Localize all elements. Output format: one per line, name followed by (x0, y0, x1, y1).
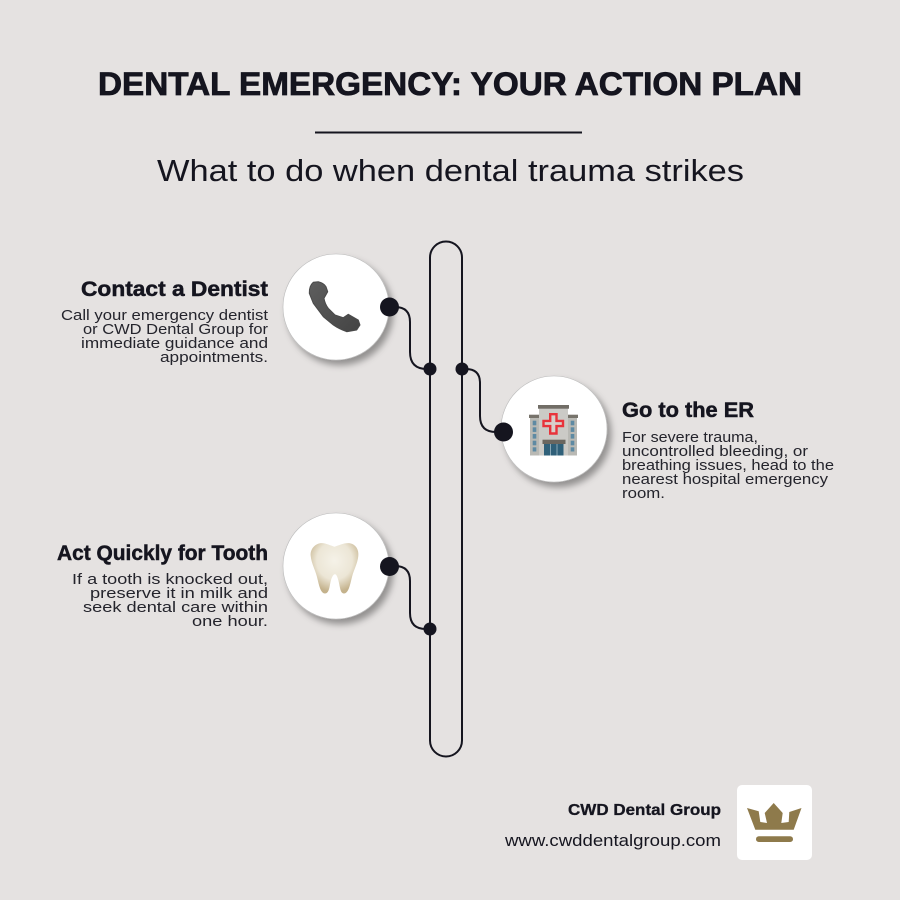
heading: Go to the ER (622, 399, 754, 422)
icon: hospital building (529, 405, 578, 456)
dot large (380, 298, 399, 316)
icon circle: tooth (283, 513, 389, 619)
dot small (456, 362, 468, 376)
icon circle: hospital (501, 376, 607, 482)
connector: line to hospital (462, 369, 504, 432)
description: seek dental care within (83, 600, 268, 616)
panel: act quickly for tooth (57, 513, 436, 636)
connector: tooth to line (389, 566, 430, 629)
icon: tooth (311, 543, 358, 594)
connector: phone to line (389, 307, 430, 369)
description: one hour. (192, 614, 268, 630)
brand name: CWD Dental Group (568, 802, 721, 819)
footer brand (504, 785, 812, 860)
heading: Act Quickly for Tooth (57, 542, 268, 565)
subtitle: What to do when dental trauma strikes (157, 153, 744, 188)
description: appointments. (160, 350, 268, 366)
description (72, 572, 268, 630)
title: DENTAL EMERGENCY: YOUR ACTION PLAN (98, 66, 802, 102)
description: or CWD Dental Group for (83, 322, 268, 338)
description: Call your emergency dentist (61, 308, 268, 324)
description: For severe trauma, (622, 430, 758, 446)
description: uncontrolled bleeding, or (622, 444, 808, 460)
website: www.cwddentalgroup.com (504, 832, 721, 850)
description (61, 308, 268, 366)
description: If a tooth is knocked out, (72, 572, 268, 588)
description: preserve it in milk and (90, 586, 268, 602)
icon: telephone handset (309, 282, 360, 332)
panel: contact a dentist (61, 254, 436, 376)
description: room. (622, 486, 665, 502)
description: breathing issues, head to the (622, 458, 834, 474)
description: nearest hospital emergency (622, 472, 829, 488)
dot small (424, 622, 436, 636)
icon: crown logo (747, 803, 802, 842)
description (622, 430, 834, 502)
panel: go to the er (456, 362, 834, 502)
dot small (424, 362, 436, 376)
description: immediate guidance and (81, 336, 268, 352)
heading: Contact a Dentist (81, 278, 268, 301)
icon circle: phone (283, 254, 389, 360)
dot large (380, 557, 399, 576)
logo tile (737, 785, 812, 860)
dot large (494, 422, 513, 442)
timeline capsule (430, 242, 462, 756)
